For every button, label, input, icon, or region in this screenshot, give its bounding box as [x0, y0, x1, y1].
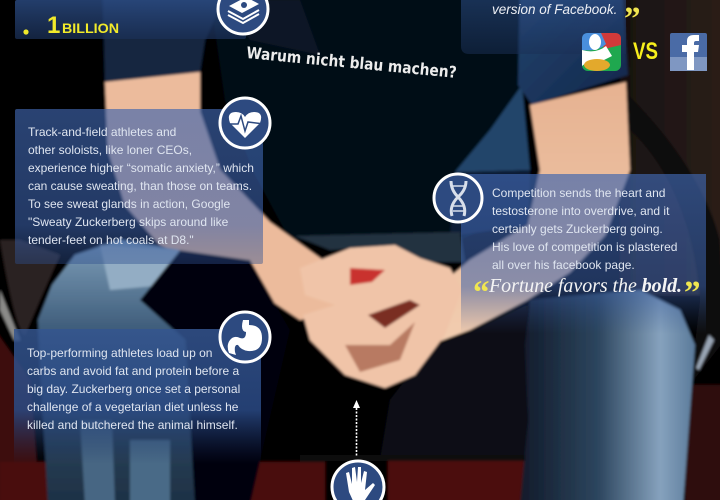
quote: fortune favors the bold: Fortune favors the bold. [488, 275, 682, 297]
closing quote: ” [624, 1, 640, 37]
panel text: certainly gets Zuckerberg going. [492, 222, 663, 236]
icon: google [582, 33, 621, 71]
chair [620, 92, 720, 385]
sleeves [103, 0, 225, 85]
panel: solo athletes anxiety [15, 109, 263, 264]
panel text: challenge of a vegetarian diet unless he [27, 400, 239, 414]
panel text: can cause sweating, than those on teams. [28, 179, 252, 193]
icon: dna [434, 174, 482, 222]
panel text: To see sweat glands in action, Google [28, 197, 230, 211]
panel text: Track-and-field athletes and [28, 125, 176, 139]
vs label: VS [633, 38, 658, 65]
panel text: tender-feet on hot coals at D8." [28, 233, 194, 247]
hands [300, 245, 462, 388]
quote: fortune favors the bold: ” [684, 275, 700, 311]
panel text: "Sweaty Zuckerberg skips around like [28, 215, 229, 229]
panel: google vs facebook quote [461, 0, 640, 54]
bottom chair strip [300, 455, 525, 461]
panel text: testosterone into overdrive, and it [492, 204, 670, 218]
panel text: carbs and avoid fat and protein before a [27, 364, 239, 378]
figure: 1 billion: BILLION [62, 20, 119, 36]
panel text: His love of competition is plastered [492, 240, 677, 254]
panel text: big day. Zuckerberg once set a personal [27, 382, 240, 396]
panel text: Top-performing athletes load up on [27, 346, 212, 360]
arrow: dotted pointing up [353, 400, 360, 456]
shirt slogan: Warum nicht blau machen? [246, 43, 457, 82]
carpet [0, 330, 40, 500]
panel text: Competition sends the heart and [492, 186, 665, 200]
panel: 1 billion [15, 0, 246, 39]
icon: stomach [220, 312, 270, 362]
jeans left [38, 240, 200, 500]
icon: heart with pulse [220, 98, 270, 148]
panel: competition [461, 174, 706, 334]
jeans center dark + right [380, 305, 527, 460]
bullet dot [23, 29, 29, 35]
arms [105, 72, 345, 320]
figure: 1 billion [47, 12, 119, 39]
shirt body [210, 0, 540, 240]
waistband of jeans [295, 232, 465, 262]
icon: money stack [218, 0, 268, 34]
icon: facebook [670, 33, 707, 71]
icon: hand [332, 461, 384, 500]
panel: carbs diet [14, 329, 261, 464]
quote text: version of Facebook. [492, 2, 617, 17]
panel text: all over his facebook page. [492, 258, 635, 272]
panel text: experience higher “somatic anxiety,” which [28, 161, 254, 175]
panel text: killed and butchered the animal himself. [27, 418, 238, 432]
quote: fortune favors the bold: “ [473, 275, 490, 311]
figure: 1 billion: 1 [47, 12, 60, 39]
quote: fortune favors the bold [473, 275, 700, 311]
panel text: other soloists, like loner CEOs, [28, 143, 192, 157]
